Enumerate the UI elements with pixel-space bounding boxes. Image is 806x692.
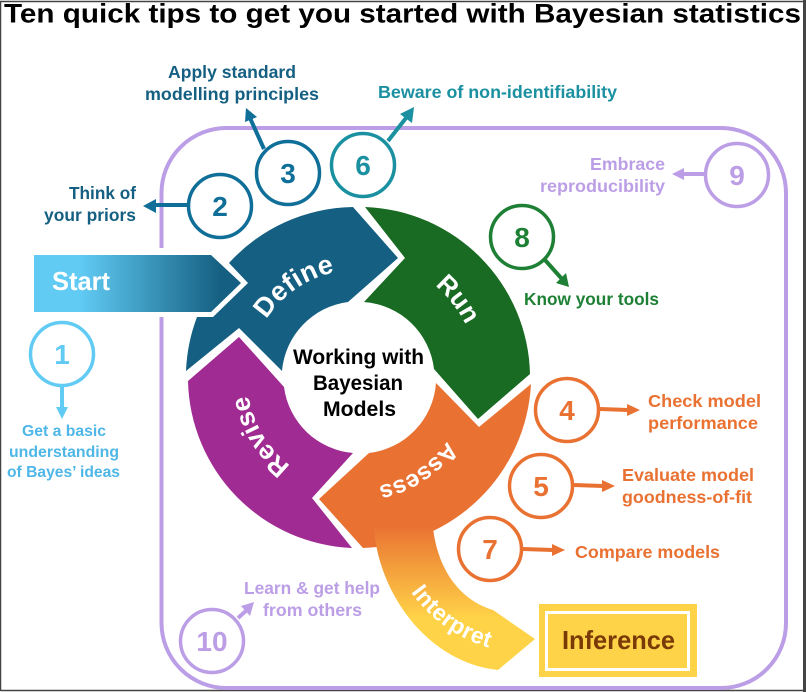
tip 9 xyxy=(540,144,768,206)
tip 9: 9 xyxy=(729,160,745,191)
tip 6: Beware of non-identifiability xyxy=(378,82,617,102)
tip 9: reproducibility xyxy=(540,176,665,196)
tip 6 xyxy=(332,82,617,196)
segment: revise xyxy=(188,337,353,548)
tip 7: 7 xyxy=(482,534,498,565)
tip 3: 3 xyxy=(280,158,296,189)
label: revise: Revise xyxy=(236,397,289,478)
tip 4 xyxy=(536,378,761,442)
centre text: Working with xyxy=(293,346,424,369)
label: interpret: Interpret xyxy=(412,584,492,648)
segment: interpret arrow xyxy=(374,530,535,670)
tip 1: of Bayes’ ideas xyxy=(7,464,120,481)
tip 4: performance xyxy=(648,413,758,433)
centre text xyxy=(293,346,424,421)
tip 3 xyxy=(145,62,320,204)
tip 6: 6 xyxy=(355,150,371,181)
segment: run xyxy=(364,207,530,419)
tip 5: 5 xyxy=(533,471,549,502)
tip 2 xyxy=(44,174,252,238)
tip 4: 4 xyxy=(559,395,575,426)
tip 4: Check model xyxy=(648,391,761,411)
segment: define xyxy=(186,207,398,371)
centre text: Models xyxy=(323,398,396,421)
tip 5: goodness-of-fit xyxy=(622,487,752,507)
panel: rounded workflow border xyxy=(162,128,786,688)
label: start: Start xyxy=(52,266,110,296)
tip 8: Know your tools xyxy=(524,289,659,309)
tip 1: 1 xyxy=(54,339,70,370)
tip 2: your priors xyxy=(44,205,136,225)
tip 9: Embrace xyxy=(590,154,665,174)
tip 10 xyxy=(180,578,380,672)
inference box: Inference xyxy=(562,625,675,655)
tip 5: Evaluate model xyxy=(622,465,754,485)
tip 10: Learn & get help xyxy=(244,578,380,598)
tip 3: modelling principles xyxy=(145,84,319,104)
centre text: Bayesian xyxy=(313,372,403,395)
start arrow xyxy=(34,255,241,312)
tip 1: understanding xyxy=(9,444,119,461)
inference box xyxy=(539,604,697,677)
tip 2: Think of xyxy=(69,183,136,203)
tip 10: from others xyxy=(263,600,362,620)
tip 8: 8 xyxy=(514,222,530,253)
label: assess: Assess xyxy=(380,442,456,498)
segment: assess xyxy=(319,383,531,548)
tip 8 xyxy=(490,206,659,309)
label: run: Run xyxy=(436,274,476,324)
tip 1 xyxy=(7,322,120,481)
tip 10: 10 xyxy=(196,626,228,657)
tip 3: Apply standard xyxy=(168,62,296,82)
tip 1: Get a basic xyxy=(22,423,106,440)
tip 2: 2 xyxy=(212,191,228,222)
right frame edge xyxy=(803,0,806,692)
label: define: Define xyxy=(252,260,332,318)
tip 7 xyxy=(458,518,720,580)
tip 5 xyxy=(510,454,754,518)
tip 7: Compare models xyxy=(575,542,720,562)
